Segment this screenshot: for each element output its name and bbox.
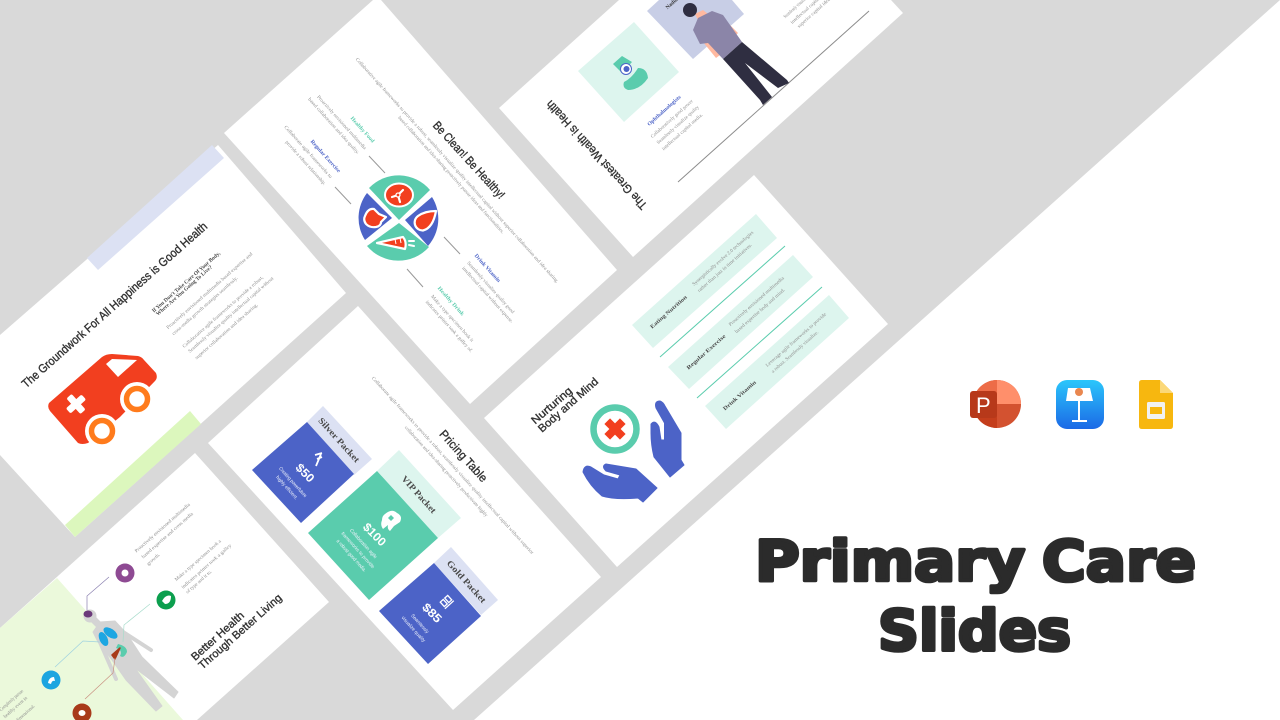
text block: body question: Collaborative agile frameworks to provide a robust, (182, 276, 265, 349)
callout: regular exercise: provide a robust relationship. (284, 140, 326, 187)
panel: greatest wealth slide (499, 0, 903, 257)
row: regular exercise (668, 255, 813, 389)
card: gold packet: Seamlessly (409, 613, 430, 635)
heading: better health: Through Better Living (196, 592, 285, 672)
heading: nurturing: Body and Mind (536, 376, 601, 435)
icon: keynote (1056, 380, 1104, 429)
text block: make a type (174, 539, 233, 595)
icon: healthy food wheel (359, 175, 438, 261)
card: gold packet: Gold Packet (445, 558, 488, 605)
text block: intro: Collaborative agile frameworks to provide a robust, seamlessly visualize quality intellectual capital without superior collaboration and idea sharing. (354, 57, 559, 285)
text block: lower left (0, 689, 37, 720)
text block: body question (151, 250, 276, 361)
callout: healthy food: Healthy Food (349, 116, 375, 144)
row: eating nutrition (632, 214, 777, 348)
icon: powerpoint (970, 380, 1021, 428)
heading: nurturing: Nurturing (529, 385, 575, 427)
text block: ophthalmologists: intellectual capital media. (662, 113, 704, 152)
callout: healthy drink: indicates printer took a galley of. (424, 300, 473, 354)
card: gold packet: $85 (419, 600, 445, 626)
card: silver packet: Silver Packet (316, 415, 362, 465)
illustration: standing person (683, 3, 789, 105)
card: vip packet: $100 (360, 520, 389, 549)
icon: ophthalmologist (613, 56, 648, 90)
callout: drink vitamin: Drink Vitamin (473, 253, 501, 284)
text block: body question: Where Are You Going To Live? (155, 264, 214, 317)
callout: healthy drink: Healthy Drink (436, 286, 466, 318)
title: Care (1042, 530, 1196, 594)
card: vip packet (308, 450, 461, 600)
heading: better health: Better Health (189, 610, 247, 663)
icon: google slides (1139, 380, 1173, 429)
text block: lower left: Completely pursue (0, 689, 25, 713)
text block: body question: Seamlessly visualize quality intellectual capital without (188, 276, 276, 354)
row: drink vitamin (705, 295, 849, 429)
card: silver packet: highly efficient. (274, 475, 299, 501)
card: silver packet: Creating powerfuture (277, 466, 308, 499)
card: gold packet: visualize quality (400, 615, 427, 644)
card: silver packet: $50 (293, 461, 318, 486)
text block: pricing intro: Collaborate agile frameworks to provide a robust, seamlessly visualize quality intellectual capital without superior (370, 376, 534, 556)
row: regular exercise: Regular Exercise (686, 333, 728, 371)
text block: proactively: Proactively envisioned multimedia (134, 502, 192, 554)
text block: pricing intro: collaboration and idea-sharing proactively productivate highly (403, 426, 488, 519)
row: regular exercise: Proactively envisioned multimedia (728, 276, 786, 328)
text block: ophthalmologists: Ophthalmologists (647, 94, 682, 128)
callout: regular exercise: Collaborate agile frameworks to (283, 125, 333, 180)
title (755, 530, 1196, 664)
row: drink vitamin: Leverage agile frameworks to provide (765, 312, 828, 369)
icon: medical cross badge (594, 408, 636, 450)
callout: regular exercise: Regular Exercise (309, 139, 342, 175)
row: drink vitamin: Drink Vitamin (722, 380, 758, 412)
icon: powerpoint: P (976, 393, 991, 418)
row: eating nutrition: Synergistically evolve 2.0 technologies (692, 231, 755, 287)
panel: nurturing slide (484, 175, 888, 567)
callout: healthy food: Proactively envisioned multimedia (315, 95, 367, 152)
text block: intro: based collaboration and idea-sharing proactively pursue ideas and functionalities. (396, 116, 505, 235)
heading: groundwork: The Groundwork For All Happiness is Good Health (19, 219, 210, 391)
icon: brown node (72, 704, 92, 720)
icon: caring hands (583, 401, 684, 502)
card: vip packet: frameworks to provide (340, 531, 376, 570)
callout: healthy drink: Make a type specimen book it (429, 295, 474, 344)
title: Slides (878, 599, 1071, 664)
text block: body question: Proactively envisioned multimedia based expertise and (166, 252, 254, 331)
card: gold packet (379, 547, 498, 664)
text block: proactively: growth. (146, 553, 162, 567)
text block: make a type: indicates printer took a galley (181, 543, 233, 590)
icon: purple node (116, 564, 134, 582)
panel: be clean slide (224, 0, 617, 404)
text block: make a type: of type and it to. (185, 570, 214, 595)
text block: ophthalmologists: Collaboratively good power (650, 99, 695, 140)
heading: pricing table: Pricing Table (437, 427, 491, 485)
callout: drink vitamin: Seamlessly visualize quality good (465, 261, 515, 315)
diagram: human body (84, 610, 178, 711)
card: vip packet: VIP Packet (400, 474, 438, 515)
card: vip packet: a robust good media. (335, 538, 367, 574)
callout: drink vitamin: intellectual capital without expense. (460, 266, 514, 325)
text block: proactively: based expertise and cross media (141, 511, 195, 560)
row: drink vitamin: a robust. Seamlessly visualize. (771, 330, 820, 375)
text block: body question: superior collaboration and idea sharing. (195, 303, 259, 361)
text block: make a type: Make a type specimen book a (174, 539, 223, 583)
row: eating nutrition: rather than just in time initiatives. (697, 243, 754, 294)
heading: greatest wealth: The Greatest Wealth is Health (543, 98, 650, 212)
text block: ophthalmologists (647, 94, 704, 152)
row: regular exercise: based expertise body and mind. (735, 288, 786, 335)
card: silver packet (252, 406, 372, 523)
callout: healthy food: based collaboration and idea quality. (306, 97, 360, 156)
text block: body question: If You Don't Take Care Of Your Body, (151, 250, 222, 314)
panel: pricing slide (208, 306, 601, 710)
row: eating nutrition: Eating Nutrition (649, 295, 689, 330)
text block: upper right (783, 0, 833, 30)
text block: ophthalmologists: Seamlessly visualize quality (656, 105, 701, 146)
panel: better health slide (0, 453, 329, 720)
panel: ambulance slide (0, 145, 346, 537)
icon: ambulance (48, 354, 157, 448)
icon: blue node (42, 670, 60, 690)
callout: regular exercise (283, 125, 342, 187)
heading: be clean: Be Clean! Be Healthy! (430, 118, 508, 202)
icon: green node (156, 590, 176, 610)
card: vip packet: Collaboration agile (348, 528, 378, 560)
text block: body question: cross-media growth strategies seamlessly. (172, 276, 239, 337)
text block: lower left: healthy event in (3, 696, 29, 720)
title: Primary (755, 530, 1025, 594)
